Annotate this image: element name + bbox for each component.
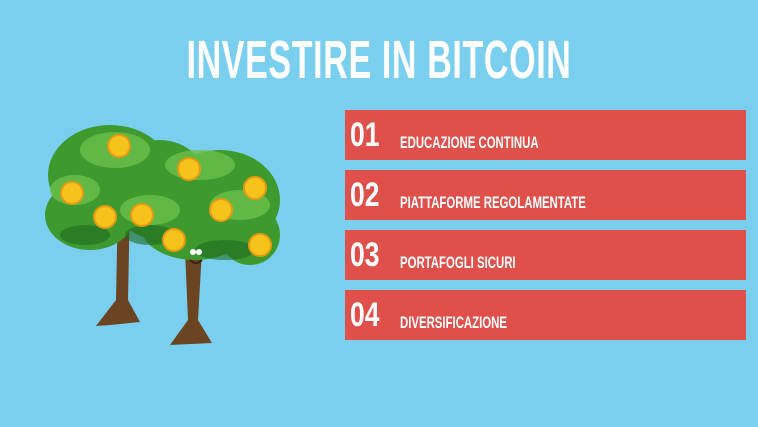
face (190, 249, 202, 263)
item 04: 04 (350, 296, 380, 334)
item 01: 01 (350, 116, 380, 154)
item 03 (345, 230, 746, 280)
canopy (45, 125, 280, 265)
item 02: 02 (350, 176, 380, 214)
title: INVESTIRE IN BITCOIN (187, 30, 571, 90)
item 02: PIATTAFORME REGOLAMENTATE (400, 193, 586, 212)
item 02 (345, 170, 746, 220)
item 03: PORTAFOGLI SICURI (400, 253, 516, 272)
item 04: DIVERSIFICAZIONE (400, 313, 507, 332)
item 04 (345, 290, 746, 340)
item 01: EDUCAZIONE CONTINUA (400, 133, 539, 152)
coins (61, 135, 271, 256)
item 01 (345, 110, 746, 160)
item 03: 03 (350, 236, 380, 274)
illustration: bitcoin money tree (45, 125, 280, 345)
trunks (95, 160, 212, 345)
